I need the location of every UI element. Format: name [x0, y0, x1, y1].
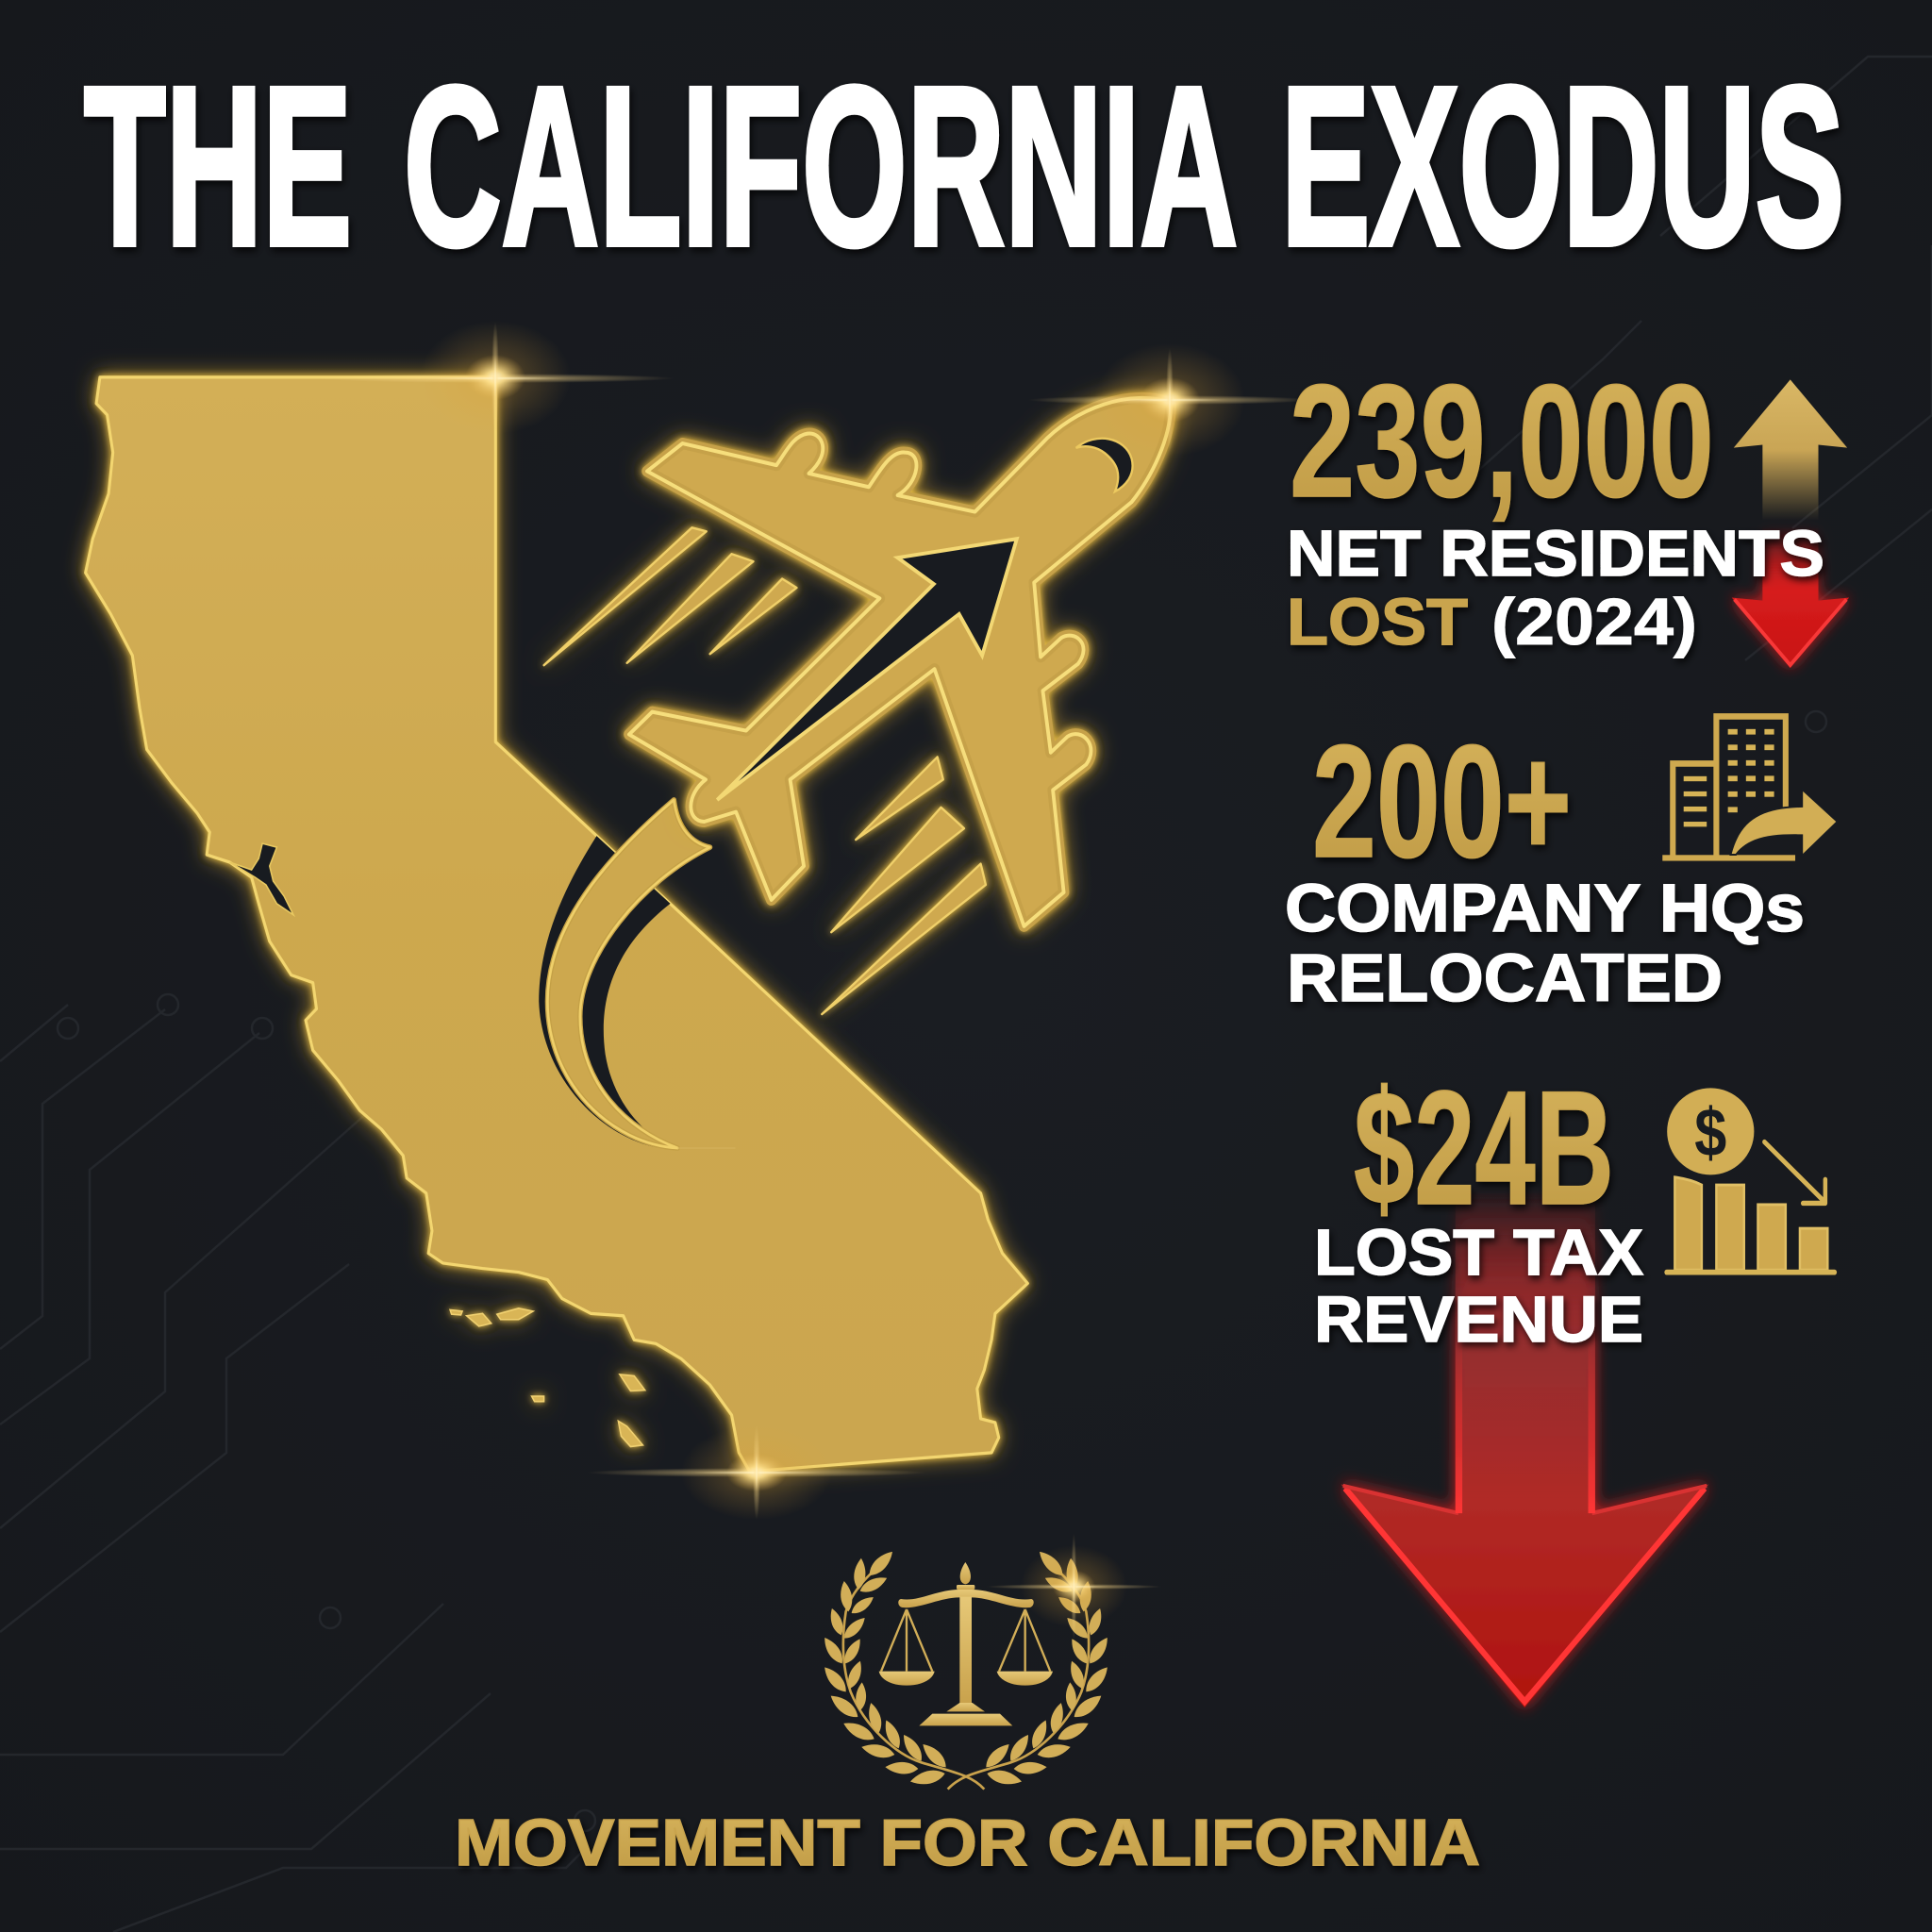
swoosh	[547, 800, 710, 1148]
label: lost: LOST	[1287, 585, 1468, 658]
speed lines lower	[822, 757, 986, 1014]
emblem: scales of justice in laurel wreath	[820, 1533, 1162, 1790]
gold up arrow	[1734, 379, 1847, 521]
label: 2024: (2024)	[1491, 585, 1697, 658]
plane cockpit	[1076, 439, 1133, 491]
map: California outline	[86, 377, 1027, 1472]
red down arrow	[1732, 527, 1849, 668]
sparkle: plane nose	[1028, 343, 1311, 457]
map: channel islands	[450, 1308, 645, 1446]
plane	[544, 398, 1171, 1014]
title: THE	[84, 40, 352, 292]
sparkle: top of map	[316, 321, 675, 435]
scales of justice	[879, 1562, 1053, 1725]
icon: falling revenue chart	[1664, 1088, 1837, 1275]
stat arrows: up and down	[1732, 379, 1849, 668]
right laurel	[948, 1547, 1112, 1790]
icon: falling revenue chart: $	[1694, 1094, 1726, 1171]
label: relocated: RELOCATED	[1287, 941, 1723, 1016]
California map with plane	[86, 377, 1171, 1472]
label: net residents: NET RESIDENTS	[1287, 517, 1824, 590]
stat: $24B: $24B	[1354, 1058, 1614, 1239]
speed lines upper	[544, 527, 796, 665]
sparkle on laurel	[986, 1533, 1162, 1641]
title: CALIFORNIA	[404, 40, 1238, 292]
sparkle: bottom of map	[587, 1425, 926, 1520]
plane body	[629, 398, 1171, 926]
icon: relocating buildings	[1662, 716, 1836, 861]
plane arrow cutout	[717, 539, 1017, 800]
label: lost tax: LOST TAX	[1314, 1216, 1643, 1289]
swoosh fading tail	[677, 1147, 735, 1149]
swoosh gap	[539, 836, 679, 1150]
stat: 200+: 200+	[1312, 712, 1572, 891]
stat: 239,000: 239,000	[1290, 352, 1714, 531]
map: San Francisco bay	[230, 843, 293, 915]
left laurel	[820, 1547, 984, 1790]
label: revenue: REVENUE	[1314, 1283, 1643, 1356]
big red arrow	[1341, 1193, 1708, 1707]
label: company HQs: COMPANY HQs	[1285, 872, 1805, 946]
footer: organisation name: MOVEMENT FOR CALIFORNIA	[455, 1806, 1480, 1879]
